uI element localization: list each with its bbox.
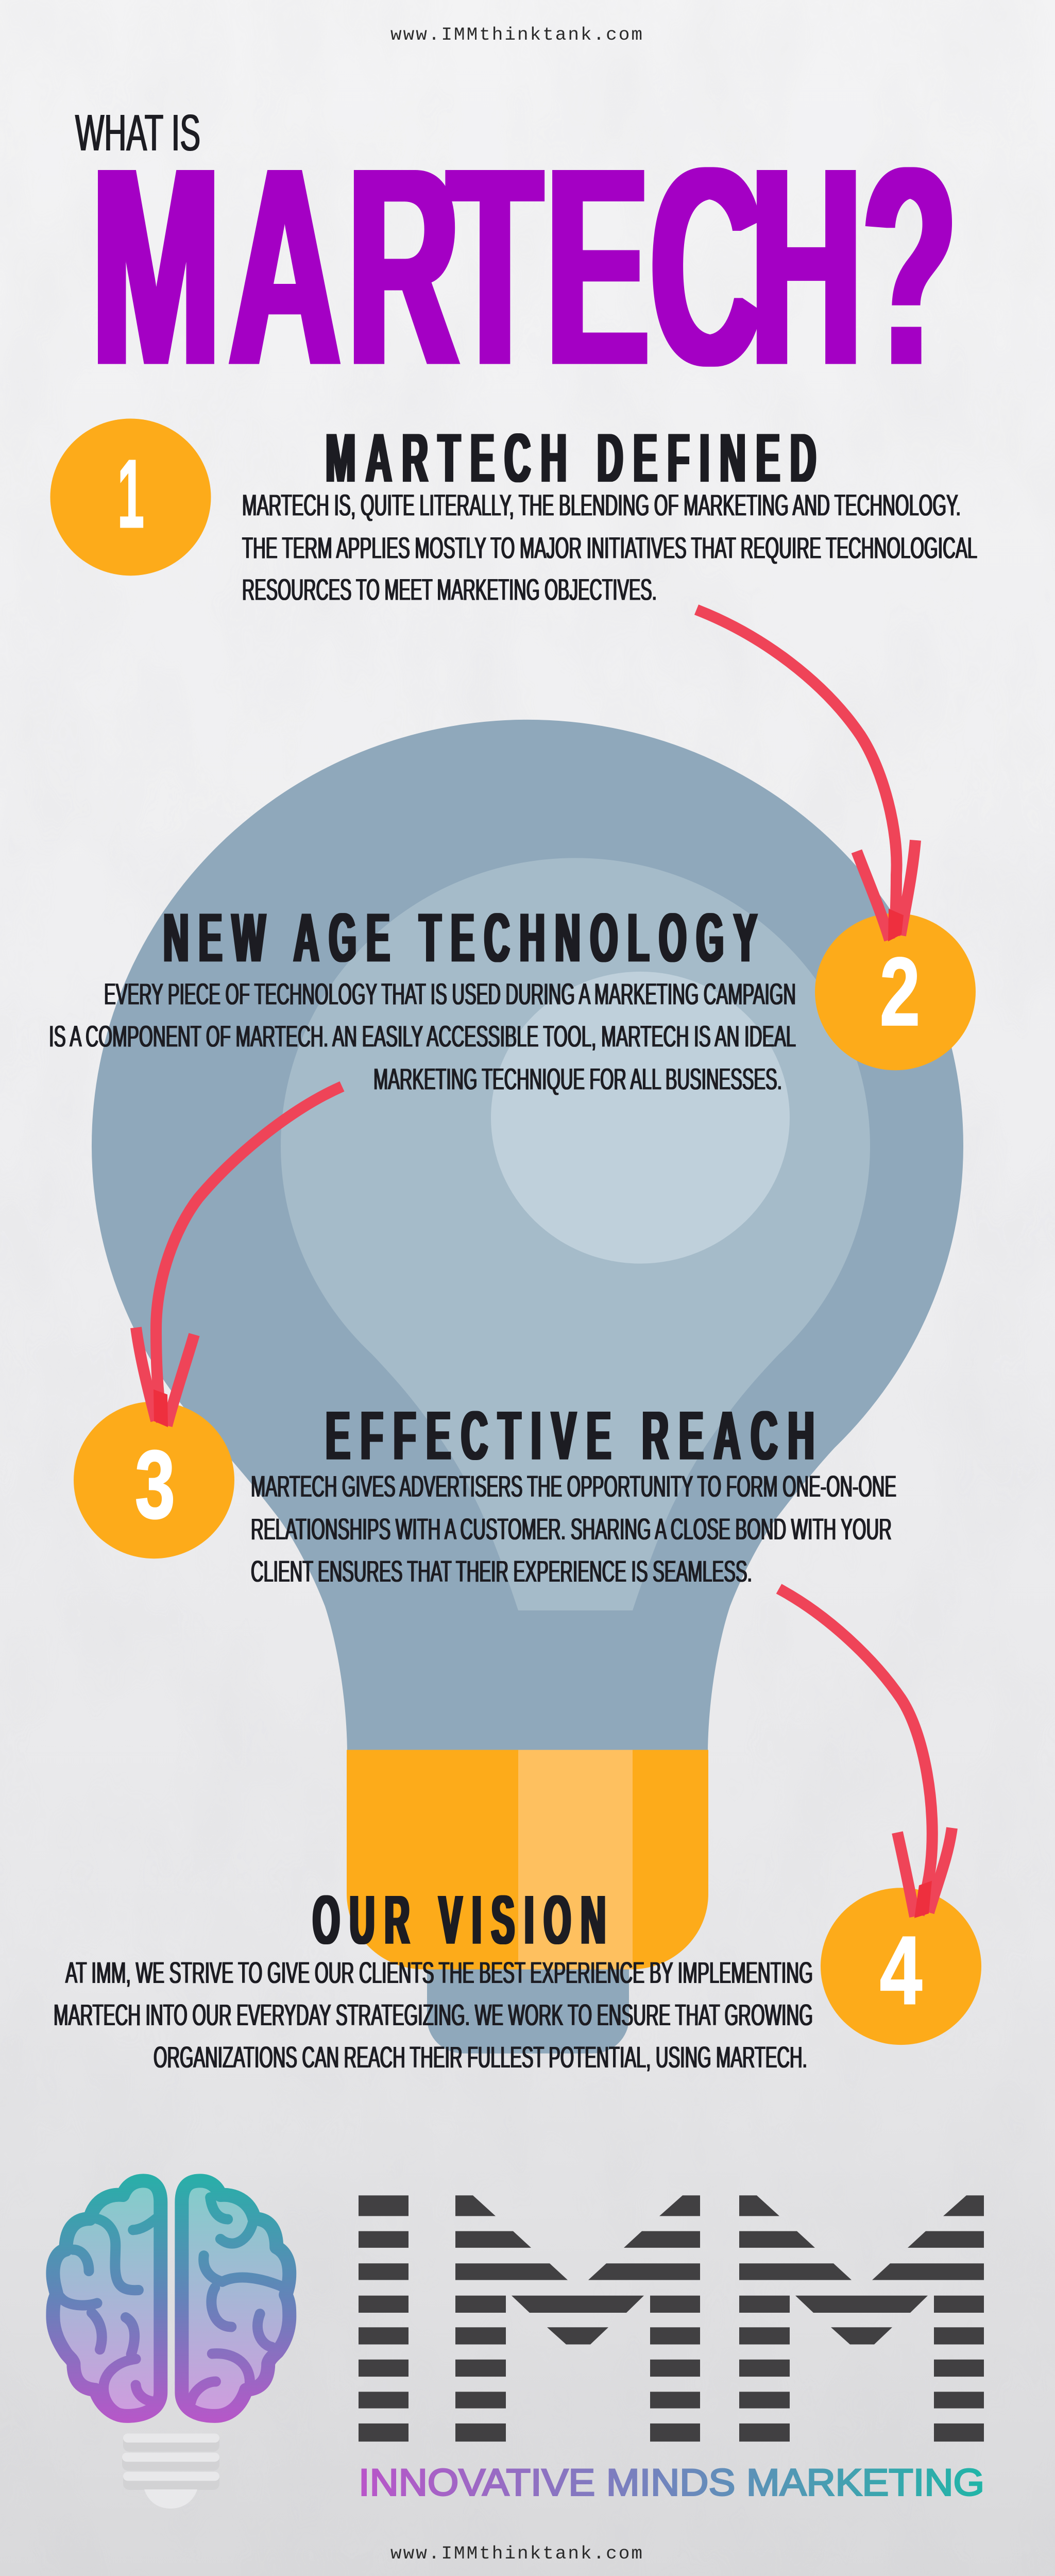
- bulb orange collar: [347, 1750, 708, 1970]
- section 4: our vision: OUR VISION: [313, 1880, 616, 1958]
- bulb glass: [92, 720, 963, 1752]
- illustration: light bulb: [92, 720, 963, 2054]
- arrow: step 2 to step 3: [136, 1087, 342, 1427]
- bulb inner glow: [281, 858, 870, 1611]
- section 2: new age technology: [49, 899, 796, 1096]
- logo: brain icon: [53, 2181, 290, 2416]
- letter I: [359, 2195, 409, 2442]
- title: martech: MARTECH?: [92, 109, 957, 424]
- logo: IMM striped letters: [359, 2195, 984, 2442]
- badge 2: 2: [880, 938, 920, 1046]
- section 4: our vision: [54, 1880, 813, 2074]
- second letter M: [739, 2195, 984, 2442]
- badge 2: [815, 913, 976, 1070]
- badge 3: 3: [135, 1431, 175, 1539]
- arrow: step 3 to step 4: [779, 1589, 952, 1918]
- right hemisphere: [182, 2181, 290, 2416]
- badge 4: [821, 1888, 981, 2045]
- arrow: step 1 to step 2: [696, 609, 915, 941]
- section 3: effective reach: [251, 1396, 896, 1588]
- left hemisphere: [53, 2181, 161, 2416]
- collar light stripe: [518, 1750, 633, 1970]
- badge 1: 1: [117, 440, 144, 548]
- badge 1: [50, 418, 211, 575]
- website url bottom: www.IMMthinktank.com: [390, 2543, 642, 2564]
- badge 4: 4: [880, 1917, 922, 2025]
- bulb screw base: [427, 1913, 629, 2054]
- badge 3: [74, 1401, 234, 1558]
- bulb highlight: [491, 972, 790, 1264]
- heading: what is: WHAT IS: [75, 104, 200, 162]
- first letter M: [455, 2195, 700, 2442]
- section 1: martech defined: RESOURCES TO MEET MARKETING OBJECTIVES.: [242, 572, 657, 607]
- website url top: www.IMMthinktank.com: [390, 25, 642, 45]
- logo: bulb base under brain: [122, 2433, 219, 2509]
- section 1: martech defined: [242, 419, 977, 607]
- logo: company name: INNOVATIVE MINDS MARKETING: [359, 2461, 984, 2503]
